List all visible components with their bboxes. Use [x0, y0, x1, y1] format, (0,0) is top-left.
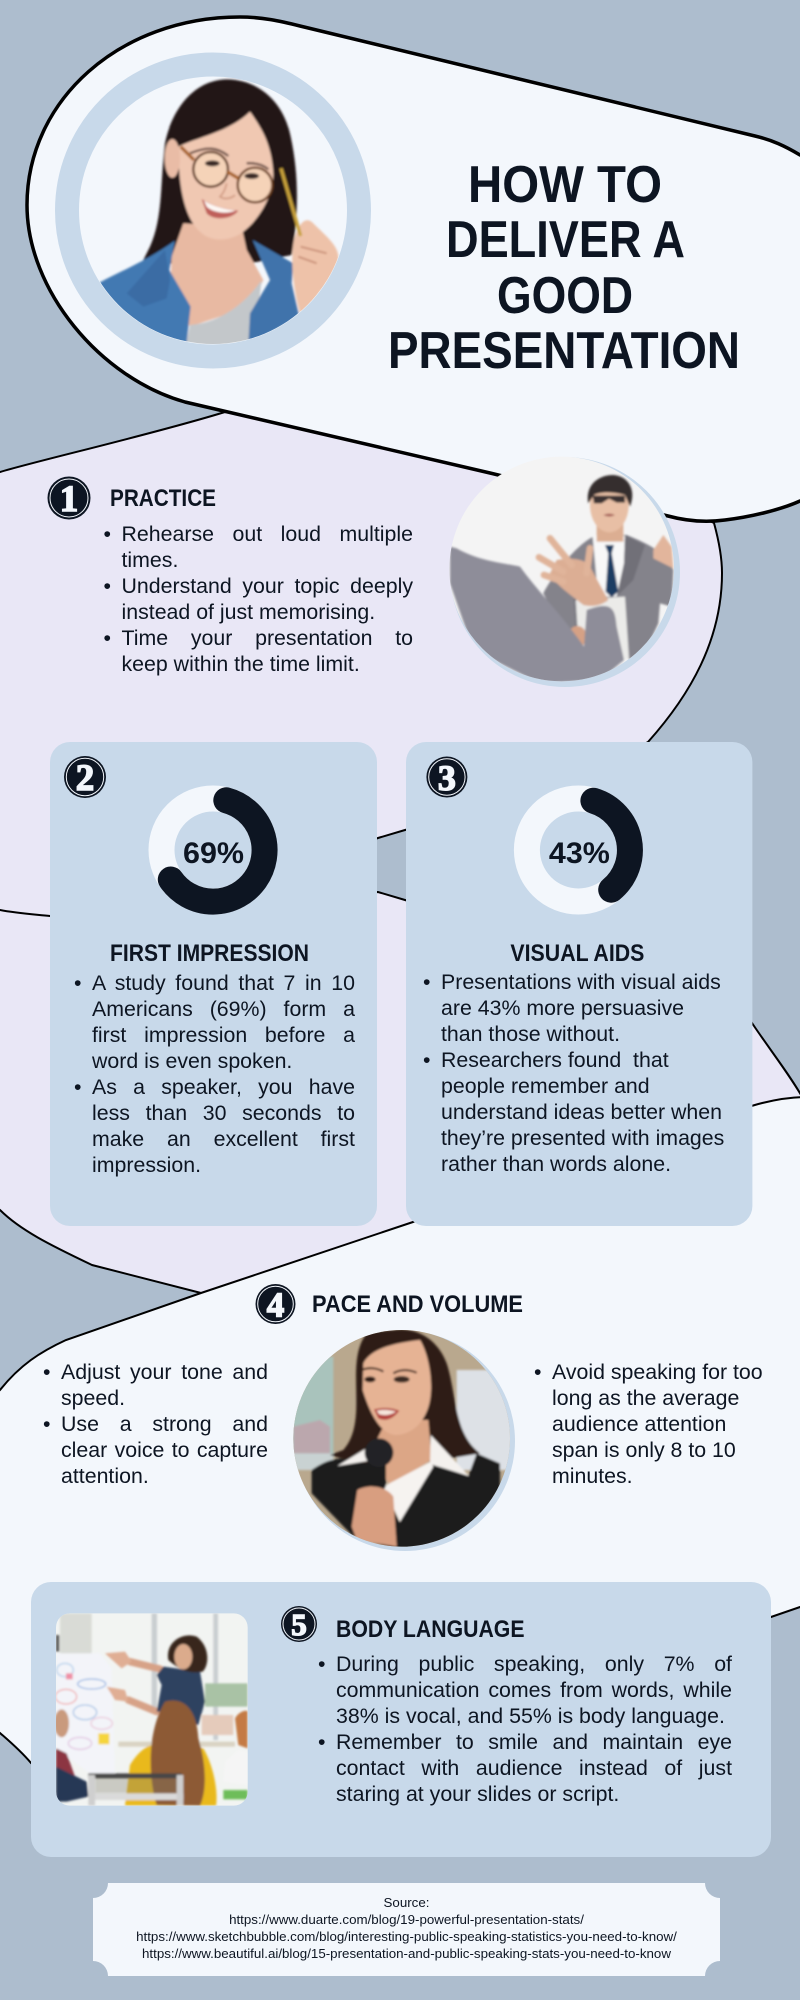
- text block: first impression facts: impression.: [92, 1153, 201, 1177]
- icon: number 1 badge: [48, 476, 90, 520]
- text block: tone and voice tips: clear voice to capture: [61, 1438, 268, 1462]
- title: HOW TO: [468, 156, 662, 214]
- text block: first impression facts: [74, 971, 355, 1177]
- text block: tone and voice tips: attention.: [61, 1464, 149, 1488]
- title: [388, 156, 740, 380]
- panel: hero with portrait and title: [55, 52, 740, 380]
- panel: 5 body language: •: [318, 1652, 325, 1676]
- text block: visual aids facts: are 43% more persuasive: [441, 996, 684, 1020]
- text block: visual aids facts: Presentations with visual aids: [441, 970, 721, 994]
- photo: presenter in grey suit: [449, 458, 680, 687]
- text block: practice tips: times.: [122, 548, 178, 572]
- panel: 1 practice: •: [104, 574, 111, 598]
- icon: number 3 badge: [426, 757, 467, 798]
- heading: visual aids: VISUAL AIDS: [510, 940, 644, 967]
- panel: 5 body language: •: [318, 1730, 325, 1754]
- text block: source links: [136, 1895, 677, 1961]
- text block: visual aids facts: people remember and: [441, 1074, 650, 1098]
- text block: attention span tip: [534, 1360, 763, 1488]
- chart: 43% donut: 43%: [548, 837, 609, 870]
- text block: tone and voice tips: Use a strong and: [61, 1412, 268, 1436]
- text block: first impression facts: As a speaker, you have: [92, 1075, 355, 1099]
- panel: 2 first impression: •: [74, 971, 81, 995]
- panel: 4 pace and volume: •: [43, 1412, 50, 1436]
- text block: attention span tip: span is only 8 to 10: [552, 1438, 736, 1462]
- heading: practice: PRACTICE: [110, 485, 216, 512]
- panel: 2 first impression: •: [74, 1075, 81, 1099]
- text block: attention span tip: minutes.: [552, 1464, 633, 1488]
- text block: first impression facts: first impression before a: [92, 1023, 355, 1047]
- chart: 69% donut: 69%: [183, 837, 244, 870]
- text block: body language facts: communication comes from words, while: [336, 1678, 732, 1702]
- icon: number 2 badge: [64, 756, 106, 799]
- text block: visual aids facts: rather than words alone.: [441, 1152, 671, 1176]
- panel: sources: [93, 1883, 720, 1976]
- text block: source links: Source:: [384, 1895, 429, 1910]
- text block: attention span tip: audience attention: [552, 1412, 726, 1436]
- chart: 43% donut: [526, 799, 630, 902]
- icon: number 1 badge: 1: [60, 479, 78, 520]
- title: DELIVER A: [446, 211, 685, 269]
- text block: body language facts: Remember to smile and maintain eye: [336, 1730, 732, 1754]
- panel: 3 visual aids: •: [423, 970, 430, 994]
- text block: source links: https://www.beautiful.ai/blog/15-presentation-and-public-speaking-stats-you-need-to-know: [142, 1946, 671, 1961]
- panel: 1 practice: [48, 458, 680, 687]
- text block: attention span tip: Avoid speaking for too: [552, 1360, 763, 1384]
- text block: visual aids facts: understand ideas better when: [441, 1100, 722, 1124]
- panel: 2 first impression: [50, 742, 377, 1226]
- text block: body language facts: 38% is vocal, and 55% is body language.: [336, 1704, 725, 1728]
- text block: first impression facts: word is even spoken.: [92, 1049, 292, 1073]
- icon: number 2 badge: 2: [76, 758, 94, 799]
- text block: source links: https://www.duarte.com/blog/19-powerful-presentation-stats/: [229, 1912, 584, 1927]
- text block: practice tips: keep within the time limit.: [122, 652, 360, 676]
- text block: tone and voice tips: speed.: [61, 1386, 125, 1410]
- text block: first impression facts: Americans (69%) form a: [92, 997, 355, 1021]
- panel: 4 pace and volume: [43, 1284, 763, 1551]
- photo: presenter at flip chart with audience: [56, 1613, 248, 1806]
- icon: number 3 badge: 3: [437, 758, 455, 798]
- text block: tone and voice tips: Adjust your tone and: [61, 1360, 268, 1384]
- text block: visual aids facts: they’re presented with images: [441, 1126, 724, 1150]
- heading: first impression: FIRST IMPRESSION: [110, 940, 309, 967]
- text block: first impression facts: less than 30 seconds to: [92, 1101, 355, 1125]
- text block: tone and voice tips: [43, 1360, 268, 1488]
- icon: number 4 badge: [256, 1284, 296, 1324]
- photo: smiling woman with glasses in a ring: [67, 64, 359, 356]
- title: GOOD: [497, 267, 633, 325]
- text block: body language facts: During public speaking, only 7% of: [336, 1652, 732, 1676]
- text block: practice tips: Rehearse out loud multiple: [122, 522, 413, 546]
- icon: number 5 badge: 5: [291, 1607, 307, 1642]
- text block: practice tips: Time your presentation to: [122, 626, 413, 650]
- panel: 4 pace and volume: •: [43, 1360, 50, 1384]
- heading: pace and volume: PACE AND VOLUME: [312, 1291, 523, 1318]
- text block: source links: https://www.sketchbubble.com/blog/interesting-public-speaking-statistics-you-need-to-know/: [136, 1929, 677, 1944]
- icon: number 4 badge: 4: [267, 1286, 284, 1324]
- text block: attention span tip: long as the average: [552, 1386, 739, 1410]
- panel: 1 practice: •: [104, 626, 111, 650]
- text block: first impression facts: A study found that 7 in 10: [92, 971, 355, 995]
- text block: practice tips: instead of just memorising.: [122, 600, 375, 624]
- text block: practice tips: [104, 522, 413, 676]
- text block: visual aids facts: Researchers found that: [441, 1048, 669, 1072]
- panel: 4 pace and volume: •: [534, 1360, 541, 1384]
- text block: visual aids facts: than those without.: [441, 1022, 620, 1046]
- panel: 1 practice: •: [104, 522, 111, 546]
- text block: practice tips: Understand your topic deeply: [122, 574, 413, 598]
- title: PRESENTATION: [388, 322, 740, 380]
- chart: 69% donut: [162, 798, 265, 902]
- panel: 5 body language: [31, 1582, 771, 1857]
- panel: 3 visual aids: [406, 742, 752, 1226]
- heading: body language: BODY LANGUAGE: [336, 1616, 524, 1643]
- text block: body language facts: contact with audience instead of just: [336, 1756, 732, 1780]
- text block: first impression facts: make an excellent first: [92, 1127, 355, 1151]
- text block: visual aids facts: [423, 970, 724, 1176]
- icon: number 5 badge: [281, 1606, 317, 1642]
- photo: woman speaking into microphone: [293, 1330, 515, 1551]
- panel: 3 visual aids: •: [423, 1048, 430, 1072]
- text block: body language facts: [318, 1652, 732, 1806]
- text block: body language facts: staring at your slides or script.: [336, 1782, 619, 1806]
